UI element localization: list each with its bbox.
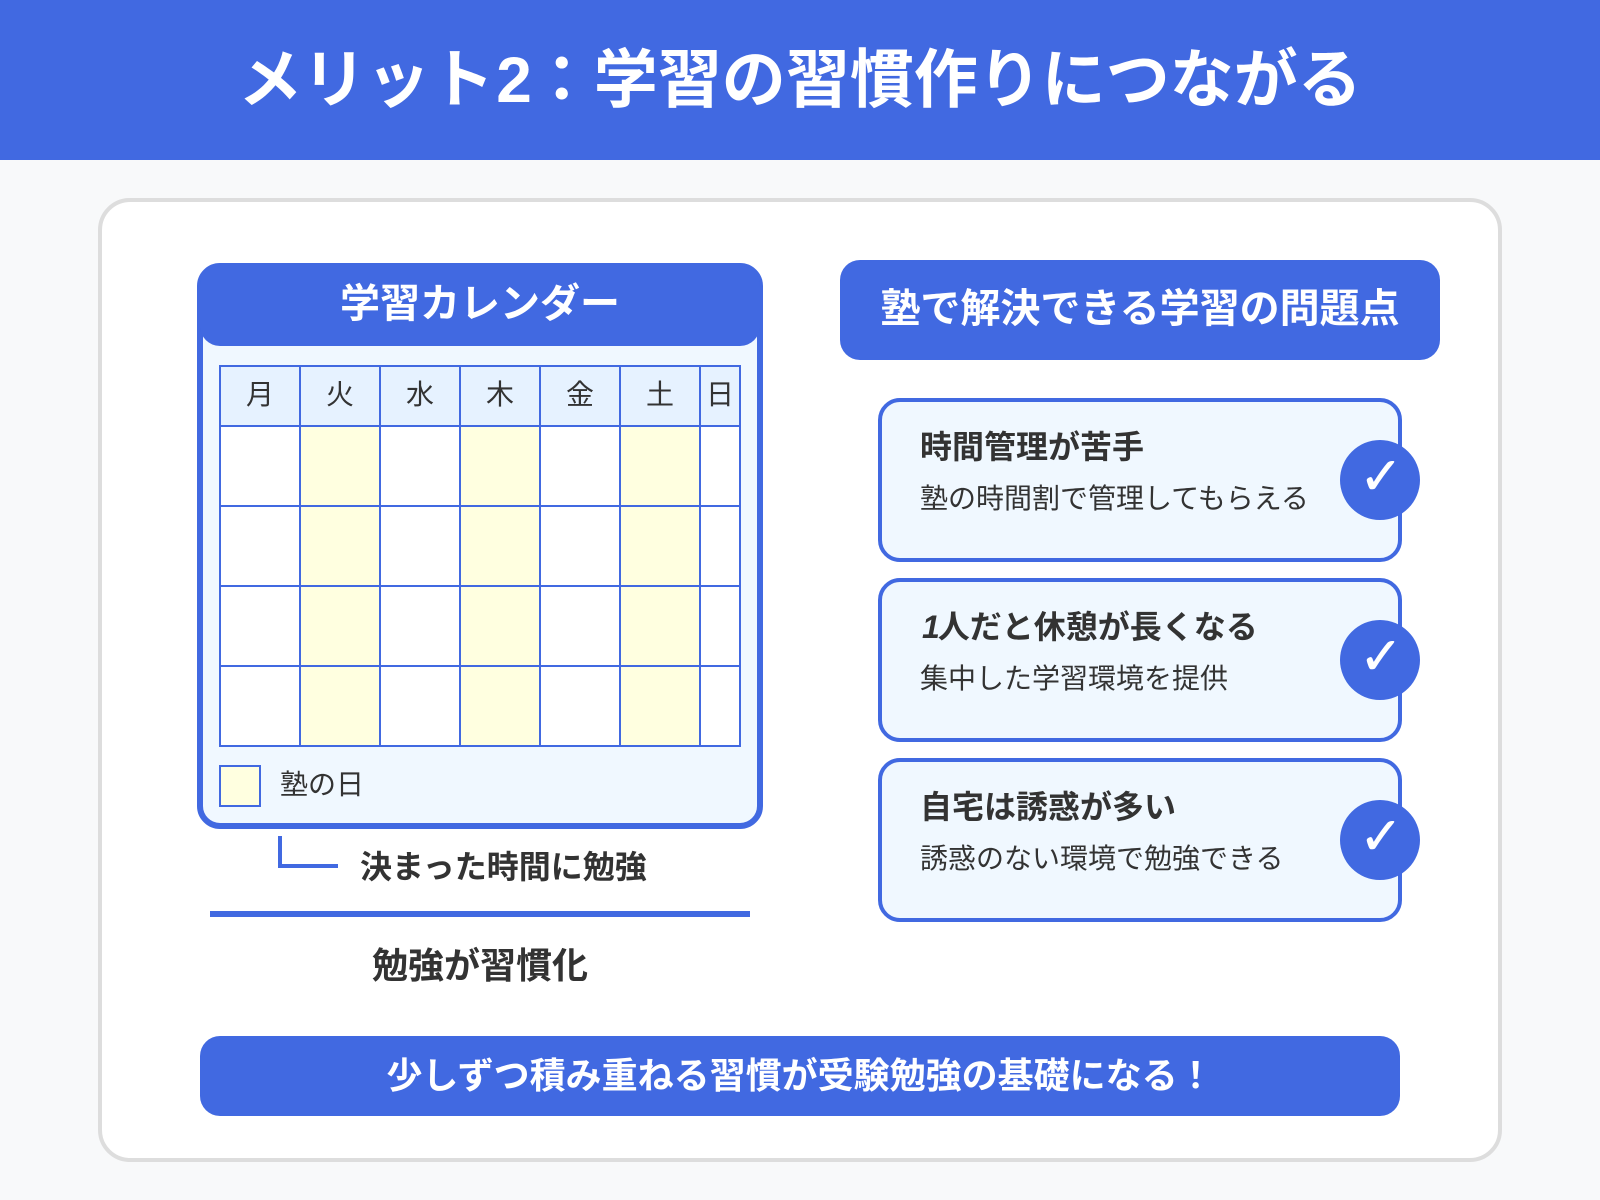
footer message: 少しずつ積み重ねる習慣が受験勉強の基礎になる！ [386,1055,1214,1096]
calendar legend: 塾の日 [280,769,364,800]
card: time management: 塾の時間割で管理してもらえる [920,483,1309,514]
card: temptations at home: 自宅は誘惑が多い [920,789,1176,825]
calendar grid: 日 [706,379,734,410]
calendar heading: 学習カレンダー [340,282,620,326]
calendar grid: 金 [566,379,594,410]
heading: problems solved by cram school: 塾で解決できる学習の問題点 [880,287,1400,331]
calendar grid: 水 [406,379,434,410]
connector arrow [280,836,338,866]
footer message [200,1036,1400,1116]
title banner [0,0,1600,160]
calendar grid: 月 [246,379,274,410]
card: temptations at home [880,760,1420,920]
icon: check 2 [1340,620,1420,700]
card: time management: 時間管理が苦手 [920,429,1144,465]
card: long breaks [880,580,1420,740]
icon: check 3: ✓ [1359,807,1403,867]
card: time management [880,400,1420,560]
label: study becomes habit: 勉強が習慣化 [372,945,588,986]
calendar heading [200,266,760,346]
calendar grid: 火 [326,379,354,410]
calendar grid: 木 [486,379,514,410]
card: long breaks: 集中した学習環境を提供 [920,663,1228,694]
panel: study calendar [200,266,760,826]
calendar legend [220,766,364,806]
calendar grid: 土 [646,379,674,410]
calendar grid [220,366,740,746]
icon: check 3 [1340,800,1420,880]
main panel [100,200,1500,1160]
title banner: メリット2：学習の習慣作りにつながる [238,44,1362,116]
label: fixed study time: 決まった時間に勉強 [360,849,647,885]
card: long breaks: 1人だと休憩が長くなる [922,609,1258,645]
card: temptations at home: 誘惑のない環境で勉強できる [920,843,1283,874]
icon: check 2: ✓ [1359,627,1403,687]
icon: check 1: ✓ [1359,447,1403,507]
icon: check 1 [1340,440,1420,520]
heading: problems solved by cram school [840,260,1440,360]
